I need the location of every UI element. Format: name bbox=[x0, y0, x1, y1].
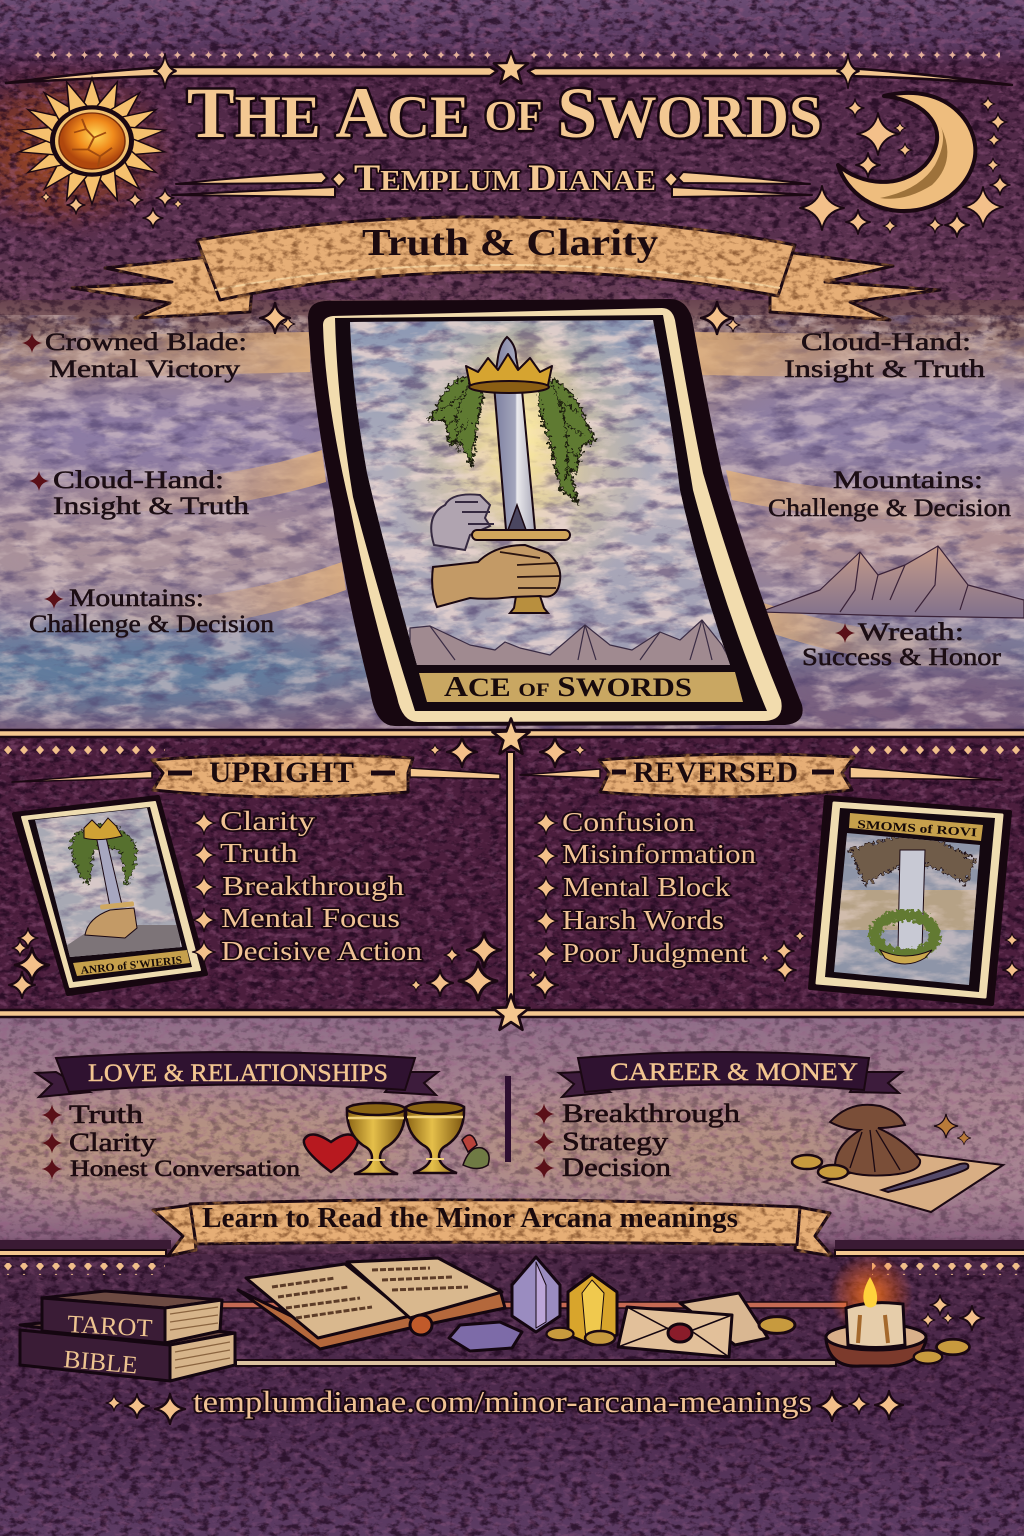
card picture: cloudy sky bbox=[350, 320, 730, 665]
love list bbox=[42, 1100, 301, 1181]
icon: stacked books bbox=[20, 1291, 235, 1381]
upright list: Clarity bbox=[220, 806, 316, 836]
title: OF bbox=[485, 94, 543, 140]
callouts: right column bbox=[768, 329, 1012, 671]
career ribbon heading bbox=[559, 1052, 902, 1097]
career ribbon heading: CAREER & MONEY bbox=[610, 1059, 858, 1086]
callouts: right column: Success & Honor bbox=[802, 644, 1002, 671]
icon: coin pouch bbox=[830, 1105, 920, 1176]
sparkles: by banner ends bbox=[260, 302, 740, 334]
reversed heading ribbon: REVERSED bbox=[633, 756, 798, 789]
callouts: right column: Wreath: bbox=[858, 619, 964, 646]
callouts: right column: Challenge & Decision bbox=[768, 495, 1012, 522]
icon: coins bbox=[792, 1155, 848, 1179]
lower book: Bible: BIBLE bbox=[62, 1346, 139, 1379]
reversed list: Poor Judgment bbox=[562, 938, 749, 968]
divider: upper rule with star bbox=[0, 719, 1024, 754]
reversed list: Misinformation bbox=[562, 839, 757, 869]
ornament: diamond rows in reading panel bbox=[0, 743, 1024, 755]
banner: learn to read: Learn to Read the Minor Arcana meanings bbox=[202, 1203, 738, 1234]
upright sparkles bbox=[9, 737, 501, 1000]
wreath: left branch bbox=[428, 372, 482, 465]
wreath: right branch bbox=[538, 374, 596, 502]
career list: Decision bbox=[562, 1153, 671, 1182]
icon: crystals and coins bbox=[449, 1257, 617, 1351]
callouts: left column: Mountains: bbox=[69, 585, 204, 612]
icon: crescent moon bbox=[838, 93, 975, 211]
shelf rules bbox=[222, 1302, 847, 1366]
upper book: Tarot bbox=[42, 1291, 222, 1343]
reversed list bbox=[534, 807, 757, 968]
title: WORDS bbox=[597, 84, 824, 150]
sword blade bbox=[494, 337, 535, 530]
small reversed card: SMOMS of ROVI bbox=[857, 817, 978, 839]
divider: lower rule with star bbox=[0, 995, 1024, 1030]
career list: Breakthrough bbox=[562, 1099, 740, 1128]
banner: learn to read bbox=[153, 1200, 832, 1256]
icon: lit candle bbox=[826, 1253, 926, 1366]
upper book: Tarot: TAROT bbox=[67, 1311, 153, 1342]
ornament: top rule with stars bbox=[6, 50, 1012, 88]
sparkles by candle bbox=[921, 1295, 984, 1330]
career list bbox=[534, 1099, 740, 1182]
reversed heading ribbon bbox=[520, 754, 1002, 797]
banner: Truth and Clarity bbox=[72, 217, 940, 320]
love list: Truth bbox=[69, 1100, 143, 1129]
panel: reversed bbox=[520, 737, 1021, 1004]
icon: flower sprig bbox=[462, 1135, 489, 1168]
background: scene panel bbox=[0, 300, 1024, 730]
upright heading ribbon: UPRIGHT bbox=[209, 756, 354, 789]
title: THE ACE bbox=[187, 73, 470, 153]
icon: sun bbox=[17, 78, 167, 204]
website link with sparkles: templumdianae.com/minor-arcana-meanings bbox=[193, 1384, 812, 1419]
icon: left goblet bbox=[347, 1103, 405, 1174]
title: S bbox=[557, 73, 597, 153]
reversed list: Confusion bbox=[562, 807, 696, 837]
callouts: left column: Challenge & Decision bbox=[29, 611, 275, 638]
love list: Clarity bbox=[69, 1128, 156, 1157]
upright list: Truth bbox=[220, 838, 299, 868]
divider: vertical rule bbox=[507, 752, 514, 1000]
card name plate: ACE OF SWORDS bbox=[444, 672, 692, 703]
upright list: Decisive Action bbox=[221, 936, 423, 966]
small upright card bbox=[14, 797, 206, 994]
upright list: Breakthrough bbox=[222, 871, 405, 901]
reversed list: Mental Block bbox=[563, 872, 731, 902]
reversed list: Harsh Words bbox=[562, 905, 724, 935]
panel: upright bbox=[9, 737, 501, 1000]
website link with sparkles bbox=[106, 1384, 903, 1424]
reversed sparkles bbox=[527, 737, 1021, 998]
sparkles: under sun bbox=[41, 189, 183, 228]
cloud hand above guard bbox=[431, 494, 494, 550]
callouts: left column: Insight & Truth bbox=[53, 493, 250, 520]
lower book: Bible bbox=[20, 1318, 235, 1381]
hand gripping sword bbox=[432, 545, 560, 607]
love list: Honest Conversation bbox=[70, 1156, 301, 1181]
background: reading panel bbox=[0, 736, 1024, 1014]
panel: love and relationships bbox=[36, 1052, 489, 1181]
main tarot card: Ace of Swords bbox=[308, 280, 803, 726]
card picture: mountains bbox=[410, 620, 735, 670]
panel: career and money bbox=[534, 1052, 1003, 1212]
ribbons behind callout labels bbox=[0, 332, 1024, 670]
icon: coins by candle bbox=[914, 1339, 970, 1364]
icon: right goblet bbox=[406, 1102, 464, 1173]
small upright card: ANRO of S'WIERIS bbox=[80, 954, 183, 977]
subtitle with ornamental rules bbox=[172, 158, 812, 199]
callouts: left column: Cloud-Hand: bbox=[53, 467, 224, 494]
upright list: Mental Focus bbox=[221, 903, 400, 933]
callouts: left column: Crowned Blade: bbox=[45, 329, 247, 356]
small reversed card bbox=[810, 797, 1010, 1004]
callouts: right column: Mountains: bbox=[833, 467, 983, 494]
callouts: left column: Mental Victory bbox=[49, 356, 241, 383]
texture: top section bbox=[0, 0, 1024, 310]
sparkles: around moon bbox=[800, 97, 1010, 237]
icon: open book bbox=[238, 1258, 505, 1349]
upright list bbox=[192, 806, 423, 966]
icon: sealed envelope bbox=[618, 1293, 795, 1357]
sparkles by pouch bbox=[934, 1114, 971, 1145]
love ribbon heading bbox=[36, 1052, 438, 1097]
callouts: right column: Insight & Truth bbox=[784, 356, 986, 383]
upright heading ribbon bbox=[12, 754, 500, 797]
background: top section bbox=[0, 0, 1024, 310]
pommel bbox=[510, 596, 548, 613]
background: love and career panel bbox=[0, 1014, 1024, 1254]
ornament: bottom diamond rows bbox=[0, 1263, 1024, 1275]
callouts: right column: Cloud-Hand: bbox=[801, 329, 971, 356]
career list: Strategy bbox=[562, 1127, 668, 1156]
footer rule bbox=[0, 1240, 1024, 1256]
callouts: left column bbox=[22, 329, 275, 638]
subtitle with ornamental rules: TEMPLUM DIANAE bbox=[354, 158, 656, 199]
love ribbon heading: LOVE & RELATIONSHIPS bbox=[88, 1060, 388, 1087]
icon: heart bbox=[304, 1134, 358, 1172]
divider: love and career bbox=[505, 1076, 511, 1162]
crossguard bbox=[472, 530, 570, 540]
icon: letter with pen bbox=[824, 1153, 1003, 1212]
crown bbox=[466, 354, 552, 393]
scenery: right mountains bbox=[760, 546, 1024, 618]
banner heading text: Truth & Clarity bbox=[362, 222, 658, 264]
background: bottom panel bbox=[0, 1254, 1024, 1536]
card frame bbox=[308, 299, 803, 726]
